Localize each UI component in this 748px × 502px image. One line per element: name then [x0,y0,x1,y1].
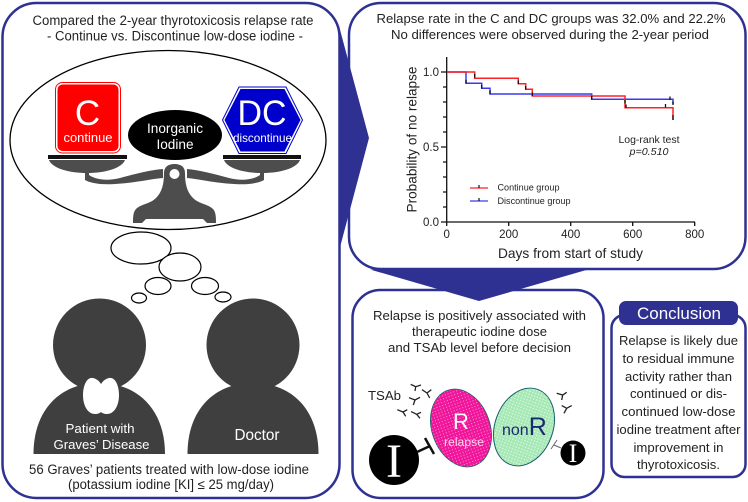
x axis values: 400 [561,229,580,241]
arrow: to predictors [370,270,588,301]
annotation: log-rank test [618,135,680,158]
legend: Discontinue group [498,196,570,206]
text: patient population: 56 Graves’ patients treated with low-dose iodine [29,462,309,477]
y axis values: 0.5 [423,142,439,154]
cell: non-relapse [483,379,565,475]
heading: study comparison: - Continue vs. Discontinue low-dose iodine - [47,28,303,44]
label: patient [54,421,150,452]
x axis values: 800 [685,229,704,241]
text: conclusion statement: activity rather than [625,369,732,384]
y axis values: 0.0 [423,217,439,229]
cell: relapse: relapse [444,435,484,449]
icon: large iodine inhibitor: I [386,435,402,488]
label: patient: Graves’ Disease [54,437,150,452]
icon: thyroid gland [83,378,119,414]
text: patient population [29,462,309,492]
text: conclusion statement [616,333,741,472]
icon: small iodine inhibitor: I [569,439,577,468]
heading: relapse rates: Relapse rate in the C and DC groups was 32.0% and 22.2% [376,11,726,26]
panel: study design [2,3,340,498]
x axis values: 600 [623,229,642,241]
text: conclusion statement: continued or dis- [630,386,727,401]
x axis values: 200 [499,229,518,241]
icon: large iodine inhibitor [369,435,434,488]
icon: continue box [56,82,120,153]
panel: relapse rate results [349,3,746,269]
cell: non-relapse: nonR [502,413,547,441]
text: association: Relapse is positively associated with [373,308,586,323]
icon: inorganic iodine ellipse: Inorganic [147,121,203,136]
figure: patient with Graves' disease [34,298,165,454]
chart axes [441,57,695,226]
heading: relapse rates [376,11,726,42]
icon: small iodine inhibitor [551,439,586,468]
icon: TSAb antibodies [397,384,572,418]
text: conclusion statement: Relapse is likely due [619,333,738,348]
annotation: log-rank test: Log-rank test [618,135,680,146]
text: conclusion statement: continued low-dose [622,404,736,419]
heading: study comparison [32,13,314,44]
icon: balance scale [48,155,301,223]
curve: discontinue group [447,72,673,104]
icon: discontinue hexagon [222,87,302,154]
icon: continue box: continue [64,130,112,145]
heading: conclusion [619,301,738,325]
text: patient population: (potassium iodine [KI] ≤ 25 mg/day) [68,477,274,492]
text: association: and TSAb level before decision [388,340,571,355]
text: association [373,308,586,355]
y axis title: Probability of no relapse [404,66,420,212]
label: TSAb: TSAb [368,388,401,403]
text: conclusion statement: iodine treatment after [616,422,741,437]
panel: conclusion [612,301,746,477]
small thought bubbles [111,232,231,303]
legend: Continue group [498,183,560,193]
censor ticks [466,74,673,120]
icon: inorganic iodine ellipse [128,110,222,160]
x axis values [443,229,704,241]
heading: conclusion: Conclusion [637,304,721,323]
y axis values: 1.0 [423,67,439,79]
label: patient: Patient with [66,421,134,436]
annotation: log-rank test: p=0.510 [628,147,669,158]
icon: continue box: C [75,94,100,133]
cell: relapse: R [453,409,469,434]
legend [470,183,570,206]
thought bubble: scale of iodine decision [10,50,326,230]
figure: doctor [188,298,318,454]
x axis values: 0 [443,229,450,241]
text: association: therapeutic iodine dose [412,324,547,339]
text: conclusion statement: improvement in [634,440,724,455]
x axis title: Days from start of study [498,246,643,261]
text: conclusion statement: to residual immune [622,351,734,366]
text: conclusion statement: thyrotoxicosis. [637,457,720,472]
panel: predictors of relapse [352,290,604,498]
icon: discontinue hexagon: DC [238,94,286,133]
chart: Kaplan-Meier curve [404,57,704,261]
heading: relapse rates: No differences were observed during the 2-year period [391,27,709,42]
curve: continue group [447,72,673,120]
heading: study comparison: Compared the 2-year thyrotoxicosis relapse rate [32,13,314,28]
arrow: to results [339,26,369,251]
icon: inorganic iodine ellipse: Iodine [156,137,194,152]
cell: relapse [420,380,502,476]
figure: doctor: Doctor [234,427,280,444]
y axis values [423,67,439,229]
icon: discontinue hexagon: discontinue [233,132,292,145]
